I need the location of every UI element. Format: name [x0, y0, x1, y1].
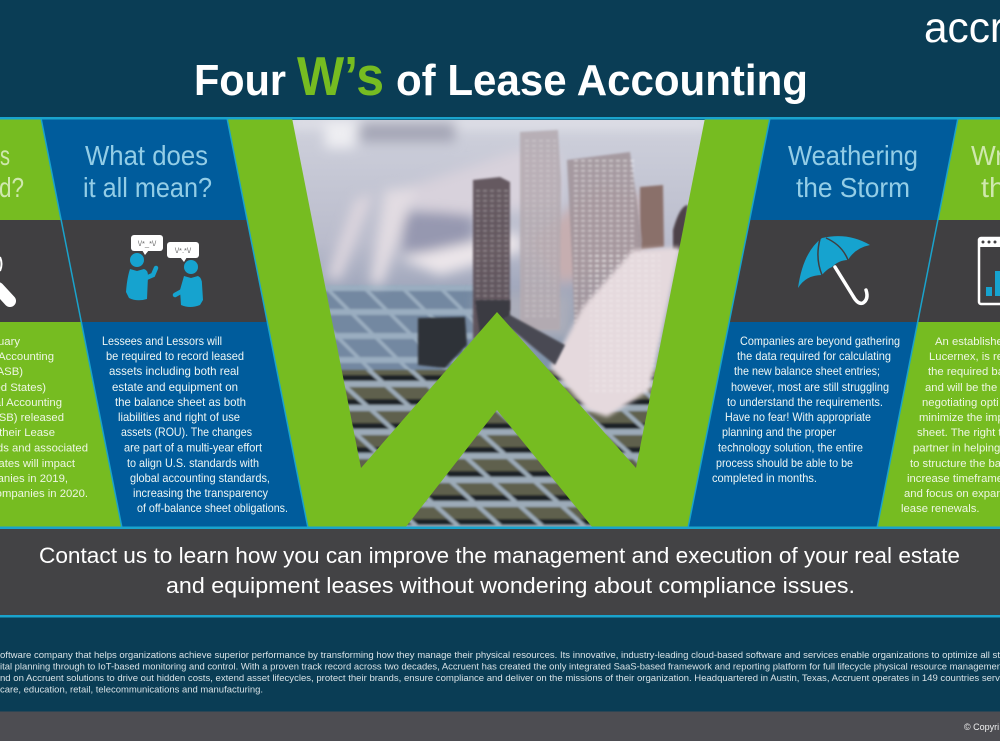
icon: two people talking: \/*_*\/ — [138, 239, 157, 248]
icon: umbrella — [798, 236, 870, 303]
text block: what does it all mean: are part of a multi-year effort — [124, 440, 263, 454]
heading: weathering the storm: Weathering — [788, 140, 918, 171]
text block: right column — [901, 336, 1000, 515]
text block: what does it all mean: liabilities and right of use — [118, 410, 240, 424]
title — [194, 45, 808, 107]
text block: weathering the storm: technology solution, the entire — [718, 440, 863, 454]
text block: right column: and focus on expan — [904, 488, 1000, 500]
text block: what does it all mean: to align U.S. standards with — [127, 456, 259, 470]
icon: two people talking — [126, 235, 203, 307]
panel: green W shape — [227, 118, 770, 528]
panel: left green column — [0, 118, 122, 528]
footer about text — [0, 650, 1000, 694]
text block: right column: negotiating opti — [922, 397, 999, 409]
contact text: Contact us to learn how you can improve the management and execution of your real estate — [39, 543, 960, 568]
footer about text: ital planning through to IoT-based monitoring and control. With a proven track record across two decades, Accruent has created the only integrated SaaS-based framework and reporting platform for full lifecycle physical resource managemen — [0, 662, 1000, 672]
copyright: © Copyri — [964, 722, 999, 732]
icon: magnifying glass — [0, 257, 10, 301]
text block: left column: ates will impact — [0, 458, 76, 470]
photo: hands on keyboard with city skyline — [288, 118, 710, 530]
text block: weathering the storm — [712, 334, 900, 485]
text block: what does it all mean: estate and equipment on — [112, 380, 238, 394]
text block: weathering the storm: however, most are still struggling — [731, 380, 889, 394]
footer rule — [0, 615, 1000, 618]
panel: what does it all mean (blue) — [41, 118, 308, 528]
contact text — [39, 543, 960, 598]
footer about panel — [0, 618, 1000, 712]
footer about text: nd on Accruent solutions to drive out hidden costs, extend asset lifecycles, protect their brands, ensure compliance and deliver on the missions of their organization. Headquartered in Austin, Texas, Accruent operates in 149 countries servi — [0, 673, 1000, 683]
icon: chart window — [979, 238, 1000, 304]
text block: left column — [0, 336, 88, 500]
text block: weathering the storm: completed in months. — [712, 471, 817, 485]
text block: what does it all mean: the balance sheet as both — [115, 395, 246, 409]
text block: weathering the storm: the data required for calculating — [737, 349, 891, 363]
heading: left column: s — [0, 140, 10, 171]
text block: weathering the storm: to understand the requirements. — [727, 395, 883, 409]
panel edges — [41, 118, 958, 528]
text block: what does it all mean: of off-balance sheet obligations. — [137, 501, 288, 515]
heading: what does it all mean — [83, 140, 212, 203]
text block: what does it all mean: Lessees and Lessors will — [102, 334, 222, 348]
text block: what does it all mean: increasing the transparency — [133, 486, 268, 500]
heading: weathering the storm — [788, 140, 918, 203]
text block: right column: lease renewals. — [901, 503, 980, 515]
dark icon band — [0, 220, 1000, 322]
title: Four — [194, 56, 286, 105]
icon: two people talking: \/*.*\/ — [175, 246, 192, 255]
top rule — [0, 117, 1000, 120]
panel: weathering the storm (blue) — [688, 118, 958, 528]
footer bar — [0, 712, 1000, 741]
contact band — [0, 529, 1000, 615]
text block: weathering the storm: the new balance sheet entries; — [734, 364, 880, 378]
bottom rule — [0, 526, 1000, 529]
heading: weathering the storm: the Storm — [796, 172, 910, 203]
heading: left column — [0, 140, 24, 203]
contact text: and equipment leases without wondering about compliance issues. — [166, 573, 855, 598]
panel: right green column — [877, 118, 1000, 528]
text block: what does it all mean: be required to record leased — [106, 349, 244, 363]
title: W’s — [297, 45, 384, 107]
title: of Lease Accounting — [396, 56, 808, 105]
heading: what does it all mean: it all mean? — [83, 172, 212, 203]
text block: weathering the storm: process should be able to be — [716, 456, 853, 470]
text block: what does it all mean: global accounting standards, — [130, 471, 270, 485]
text block: right column: partner in helping — [913, 442, 1000, 454]
text block: what does it all mean — [102, 334, 288, 515]
footer about text: care, education, retail, telecommunications and manufacturing. — [0, 684, 263, 694]
text block: right column: to structure the ba — [910, 458, 1000, 470]
text block: weathering the storm: Companies are beyond gathering — [740, 334, 900, 348]
text block: weathering the storm: Have no fear! With appropriate — [725, 410, 871, 424]
heading: right column — [971, 140, 1000, 203]
text block: weathering the storm: planning and the proper — [722, 425, 836, 439]
text block: what does it all mean: assets including both real — [109, 364, 239, 378]
text block: what does it all mean: assets (ROU). The changes — [121, 425, 252, 439]
footer about text: oftware company that helps organizations achieve superior performance by transforming how they manage their physical resources. Its innovative, industry-leading cloud-based software and services enable organizations to optimize all st — [0, 650, 1000, 660]
header background — [0, 0, 1000, 118]
heading: what does it all mean: What does — [85, 140, 208, 171]
text block: left column: their Lease — [0, 427, 55, 439]
